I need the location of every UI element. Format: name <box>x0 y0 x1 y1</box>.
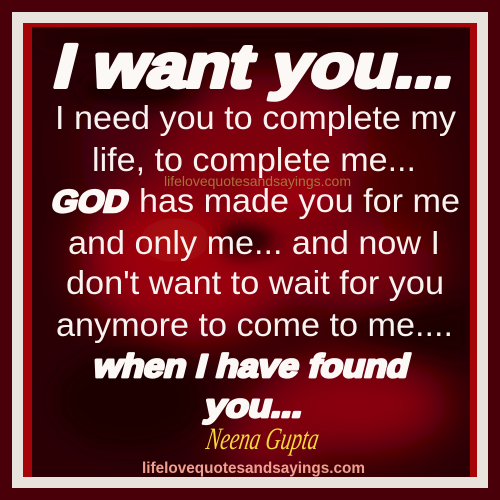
signature: Neena Gupta: Neena Gupta <box>203 422 322 457</box>
quote line 3 with bold GOD: GOD <box>48 183 133 219</box>
faint watermark: lifelovequotesandsayings.com <box>164 173 351 189</box>
quote text line 4: and only me... and now I <box>68 224 440 261</box>
quote text line 5: don't want to wait for you <box>66 264 444 301</box>
site url: lifelovequotesandsayings.com <box>142 460 365 477</box>
bold line: when I have found: when I have found <box>89 348 414 384</box>
quote line 3 with bold GOD: has made you for me <box>139 182 460 219</box>
quote text line 6: anymore to come to me.... <box>56 306 453 343</box>
heading: I want you...: I want you... <box>48 32 465 101</box>
quote text line 1: I need you to complete my <box>55 99 457 136</box>
quote text line 2: life, to complete me... <box>92 141 416 178</box>
bold line: you...: you... <box>201 388 308 424</box>
